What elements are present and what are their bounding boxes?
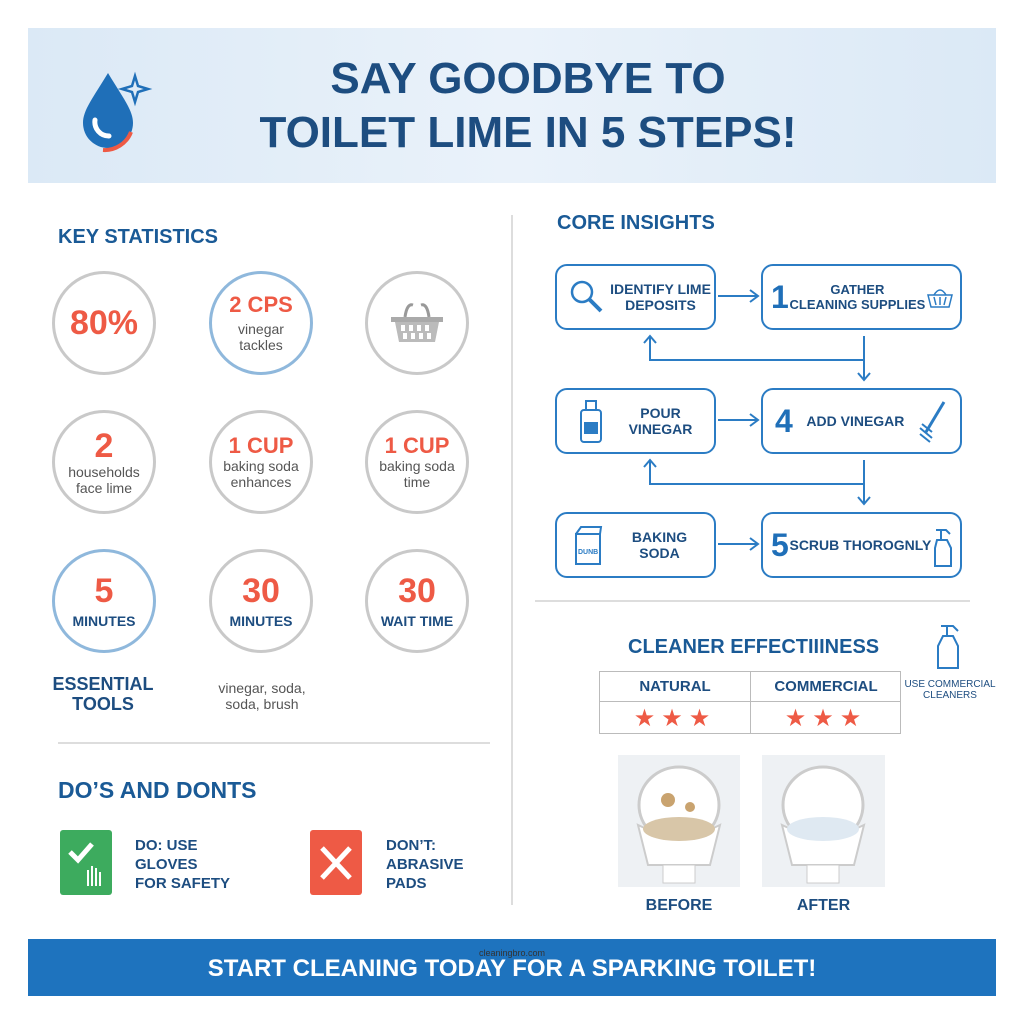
do item: DO: USE	[135, 837, 198, 854]
footer banner: START CLEANING TODAY FOR A SPARKING TOILET!	[208, 955, 816, 982]
stat 5 minutes: 5	[95, 572, 113, 610]
heading: dos and donts: DO’S AND DONTS	[58, 777, 256, 803]
stat 2 households: 2	[95, 427, 113, 465]
dont item: DON’T:	[386, 837, 436, 854]
icon: spray + callout: USE COMMERCIAL	[904, 679, 996, 690]
essential tools	[52, 674, 154, 714]
stat 5 minutes: MINUTES	[72, 613, 136, 629]
arrows	[643, 289, 871, 551]
step 4	[761, 388, 962, 454]
table: ★★★	[785, 705, 867, 732]
step baking soda: DUNB	[578, 549, 598, 556]
step 4: ADD VINEGAR	[806, 413, 904, 429]
stat 30 minutes	[209, 549, 313, 653]
stat 1 cup: baking soda	[223, 458, 299, 474]
stat 5 minutes	[52, 549, 156, 653]
step 5	[761, 512, 962, 578]
step identify	[555, 264, 716, 330]
dont item: PADS	[386, 875, 427, 892]
flowchart	[555, 264, 962, 578]
title	[259, 54, 797, 157]
stat 80%: 80%	[70, 304, 138, 342]
stat 80%	[52, 271, 156, 375]
stat 1 cup: enhances	[231, 474, 291, 490]
dont item: ABRASIVE	[386, 856, 464, 873]
step 1: 1	[771, 278, 789, 314]
stat 2 cps	[209, 271, 313, 375]
icon: spray + callout: CLEANERS	[923, 690, 977, 701]
stat 2 households: households	[68, 464, 140, 480]
table	[599, 671, 901, 734]
footer banner	[28, 939, 996, 996]
vertical divider	[511, 215, 513, 905]
do item: GLOVES	[135, 856, 198, 873]
stat 2 cps: 2 CPS	[229, 292, 293, 317]
tools list: vinegar, soda,	[218, 680, 306, 696]
before image	[618, 755, 740, 887]
tools list: soda, brush	[225, 696, 299, 712]
step baking soda: BAKING	[632, 529, 687, 545]
stat 1 cup: 1 CUP	[229, 433, 293, 458]
dont item	[310, 830, 464, 895]
divider	[58, 742, 490, 744]
step pour: VINEGAR	[629, 421, 692, 437]
essential tools: ESSENTIAL	[52, 674, 154, 694]
step 5: 5	[771, 526, 789, 562]
step pour	[555, 388, 716, 454]
stat 2 cps: tackles	[239, 337, 283, 353]
do item: FOR SAFETY	[135, 875, 230, 892]
footer banner: cleaningbro.com	[479, 948, 545, 958]
stat 30 minutes: MINUTES	[230, 613, 292, 629]
step 5: SCRUB THOROGNLY	[789, 537, 931, 553]
stat 1 cup time: baking soda	[379, 458, 455, 474]
step 1: CLEANING SUPPLIES	[790, 297, 925, 312]
icon: cross	[310, 830, 362, 895]
divider	[535, 600, 970, 602]
icon: water drop	[83, 72, 152, 152]
stat 30 wait	[365, 549, 469, 653]
title: TOILET LIME IN 5 STEPS!	[259, 108, 797, 157]
table: COMMERCIAL	[774, 678, 878, 695]
panel: stats circles	[52, 271, 469, 714]
step 1	[761, 264, 962, 330]
stat 2 households	[52, 410, 156, 514]
stat 1 cup time: time	[404, 474, 430, 490]
stat 1 cup time	[365, 410, 469, 514]
heading: core insights: CORE INSIGHTS	[557, 212, 715, 234]
stat 2 cps: vinegar	[238, 321, 284, 337]
tools list	[218, 680, 306, 712]
step identify: DEPOSITS	[625, 297, 696, 313]
stat 30 minutes: 30	[242, 572, 280, 610]
stat 1 cup	[209, 410, 313, 514]
title: SAY GOODBYE TO	[330, 54, 726, 103]
stat 30 wait: WAIT TIME	[381, 613, 453, 629]
step 1: GATHER	[830, 282, 884, 297]
step identify: IDENTIFY LIME	[610, 281, 711, 297]
do item	[60, 830, 230, 895]
after image	[762, 755, 885, 887]
stat 1 cup time: 1 CUP	[385, 433, 449, 458]
icon: basket	[365, 271, 469, 375]
step pour: POUR	[640, 405, 681, 421]
step baking soda	[555, 512, 716, 578]
table: ★★★	[634, 705, 716, 732]
heading: cleaner effectiveness: CLEANER EFFECTIIINESS	[628, 636, 879, 658]
essential tools: TOOLS	[72, 694, 134, 714]
step 4: 4	[775, 402, 793, 438]
label after: AFTER	[797, 897, 850, 914]
stat 30 wait: 30	[398, 572, 436, 610]
table: NATURAL	[639, 678, 711, 695]
icon: check	[60, 830, 112, 895]
icon: spray + callout	[904, 625, 996, 701]
header banner	[28, 28, 996, 183]
heading: key statistics: KEY STATISTICS	[58, 226, 218, 248]
label before: BEFORE	[646, 897, 712, 914]
stat 2 households: face lime	[76, 480, 132, 496]
step baking soda: SODA	[639, 545, 680, 561]
